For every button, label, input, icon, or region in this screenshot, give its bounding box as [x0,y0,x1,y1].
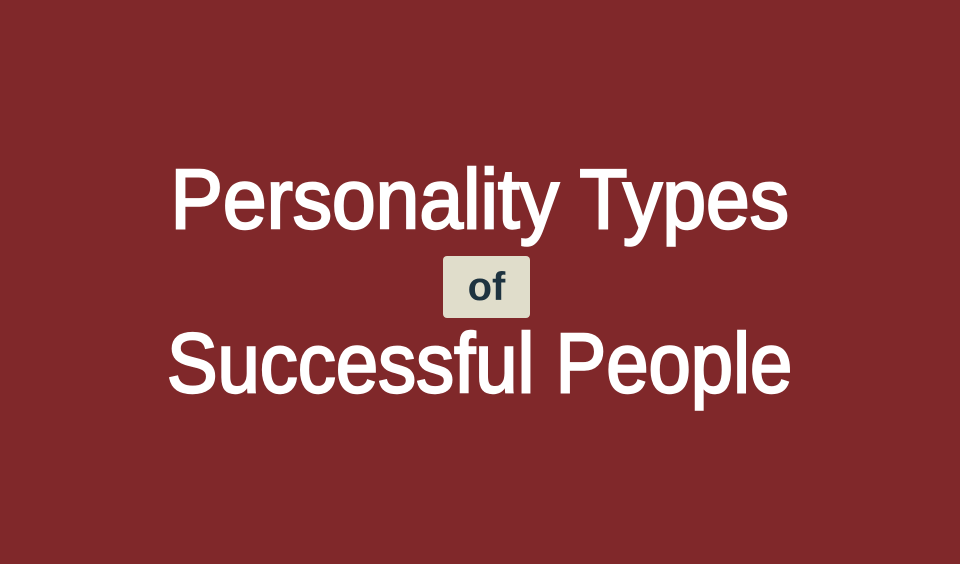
badge: of: of [468,265,505,309]
badge: of [443,256,530,318]
title line 2: Successful People [167,316,793,410]
title line 1: Personality Types [171,152,789,246]
